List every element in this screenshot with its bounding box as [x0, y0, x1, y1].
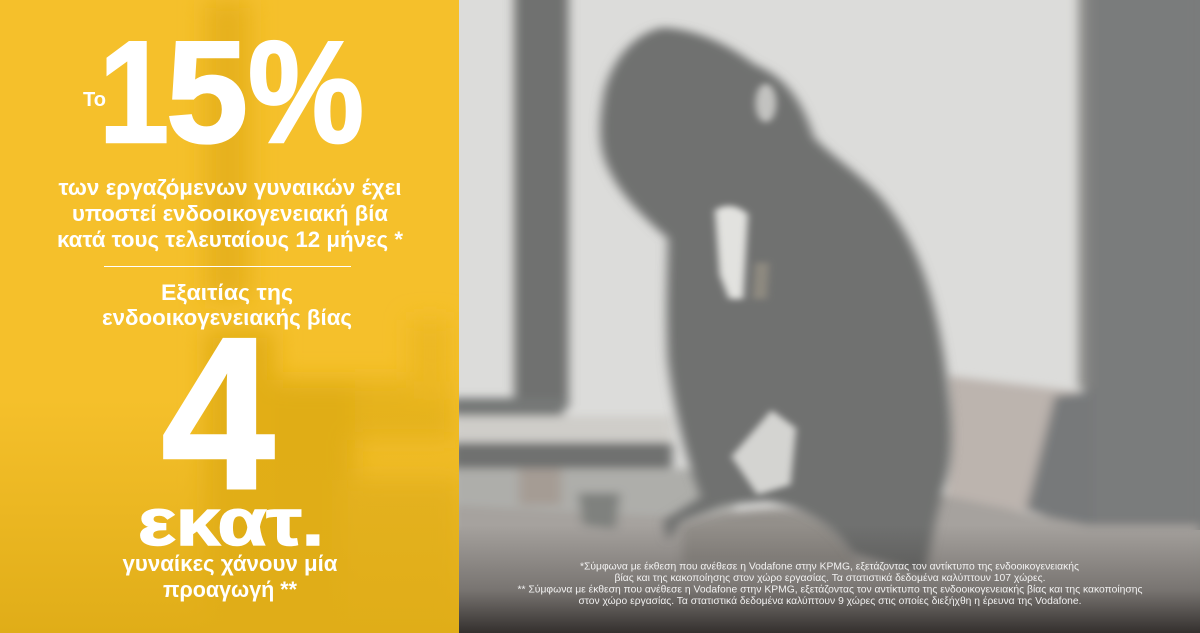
- big number 15%: [99, 11, 364, 173]
- footnotes: *Σύμφωνα με έκθεση που ανέθεσε η Vodafone στην KPMG, εξετάζοντας τον αντίκτυπο της ενδοοικογενειακής: [580, 560, 1079, 572]
- footnotes: βίας και της κακοποίησης στον χώρο εργασίας. Τα στατιστικά δεδομένα καλύπτουν 107 χώρες.: [614, 572, 1046, 584]
- panel: yellow column: [0, 0, 459, 633]
- text block: 15% description: υποστεί ενδοοικογενειακή βία: [72, 201, 388, 226]
- footnotes: [518, 560, 1142, 607]
- label: To: Το: [83, 89, 106, 111]
- text block: women lose a promotion: [122, 551, 338, 602]
- big number 4: 4: [162, 292, 274, 534]
- big number 15%: 5: [166, 11, 248, 173]
- text block: because of domestic violence: ενδοοικογενειακής βίας: [102, 305, 352, 330]
- text block: women lose a promotion: προαγωγή **: [163, 577, 297, 602]
- panel: blurred photo of a distressed woman: [451, 0, 1200, 633]
- footnotes: στον χώρο εργασίας. Τα στατιστικά δεδομένα καλύπτουν 9 χώρες στις οποίες διεξήχθη η έρευνα της Vodafone.: [578, 595, 1082, 607]
- gaps between arm and body: [715, 84, 796, 495]
- text block: 15% description: [57, 175, 403, 252]
- divider line: [104, 266, 351, 267]
- text block: because of domestic violence: [102, 280, 352, 330]
- text block: women lose a promotion: γυναίκες χάνουν μία: [122, 551, 338, 576]
- text block: 15% description: κατά τους τελευταίους 12 μήνες *: [57, 227, 403, 252]
- big number 15%: 1: [99, 11, 169, 173]
- text block: 15% description: των εργαζόμενων γυναικών έχει: [58, 175, 402, 200]
- heading: 15% statistic: [83, 11, 364, 173]
- silhouette of the woman: [600, 27, 951, 574]
- text block: because of domestic violence: Εξαιτίας της: [161, 280, 293, 305]
- footnotes: ** Σύμφωνα με έκθεση που ανέθεσε η Vodafone στην KPMG, εξετάζοντας τον αντίκτυπο της ενδοοικογενειακής βίας και της κακοποίησης: [518, 584, 1142, 596]
- big number 15%: %: [248, 11, 364, 173]
- heading: million: εκατ.: [138, 485, 324, 559]
